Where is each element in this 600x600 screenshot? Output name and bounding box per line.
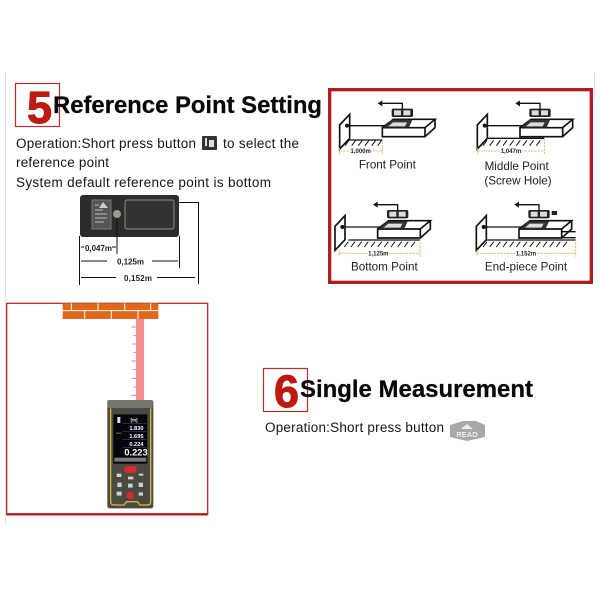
diagram: middle point <box>477 100 573 187</box>
diagram: bottom point: 1,125m <box>368 251 388 257</box>
laser beam and ruler <box>131 319 144 400</box>
diagram: front point <box>340 100 435 171</box>
section 5 operation text <box>16 136 299 190</box>
section 6 operation text: Operation:Short press button <box>265 420 444 435</box>
diagram: bottom point: Bottom Point <box>351 261 418 274</box>
rangefinder device: 1.695 <box>129 434 143 440</box>
rangefinder device: 0.224 <box>129 442 144 448</box>
section 5 heading <box>16 82 322 133</box>
diagram: front point: 1,000m <box>351 149 371 155</box>
device top view with dimensions: 0,152m <box>124 274 152 283</box>
diagram: middle point: Middle Point <box>485 160 549 173</box>
device top view with dimensions: 0,047m <box>85 244 112 253</box>
section 6 heading <box>264 366 533 417</box>
rangefinder device: [m] <box>131 418 138 423</box>
rangefinder device: 0.223 <box>124 447 148 457</box>
section 5 operation text: System default reference point is bottom <box>16 175 271 190</box>
rangefinder device <box>107 400 153 508</box>
diagram: end-piece point: End-piece Point <box>485 261 568 274</box>
section 5 heading: Reference Point Setting <box>53 92 322 119</box>
device top view with dimensions <box>80 195 198 285</box>
section 6 heading: 6 <box>274 366 299 417</box>
diagram: middle point: (Screw Hole) <box>484 174 552 187</box>
section 6 heading: Single Measurement <box>300 376 533 403</box>
panel: single measurement illustration <box>7 303 208 514</box>
panel: reference point diagrams <box>330 90 591 282</box>
icon: reference button <box>202 136 217 150</box>
section 5 operation text: Operation:Short press button <box>16 136 196 151</box>
brick wall <box>63 303 158 319</box>
diagram: front point: Front Point <box>359 158 417 171</box>
rangefinder device: 1.830 <box>129 426 143 432</box>
diagram: bottom point <box>335 202 430 274</box>
section 5 heading: 5 <box>27 82 52 133</box>
diagram: end-piece point: 1,152m <box>516 251 536 257</box>
diagram: end-piece point <box>476 202 576 274</box>
icon: READ button <box>450 421 485 441</box>
section 5 operation text: to select the <box>223 136 299 151</box>
device top view with dimensions: 0,125m <box>117 258 144 266</box>
page frame lines <box>6 72 594 525</box>
icon: READ button: READ <box>456 430 478 439</box>
diagram: middle point: 1,047m <box>501 149 521 155</box>
section 5 operation text: reference point <box>16 155 109 170</box>
